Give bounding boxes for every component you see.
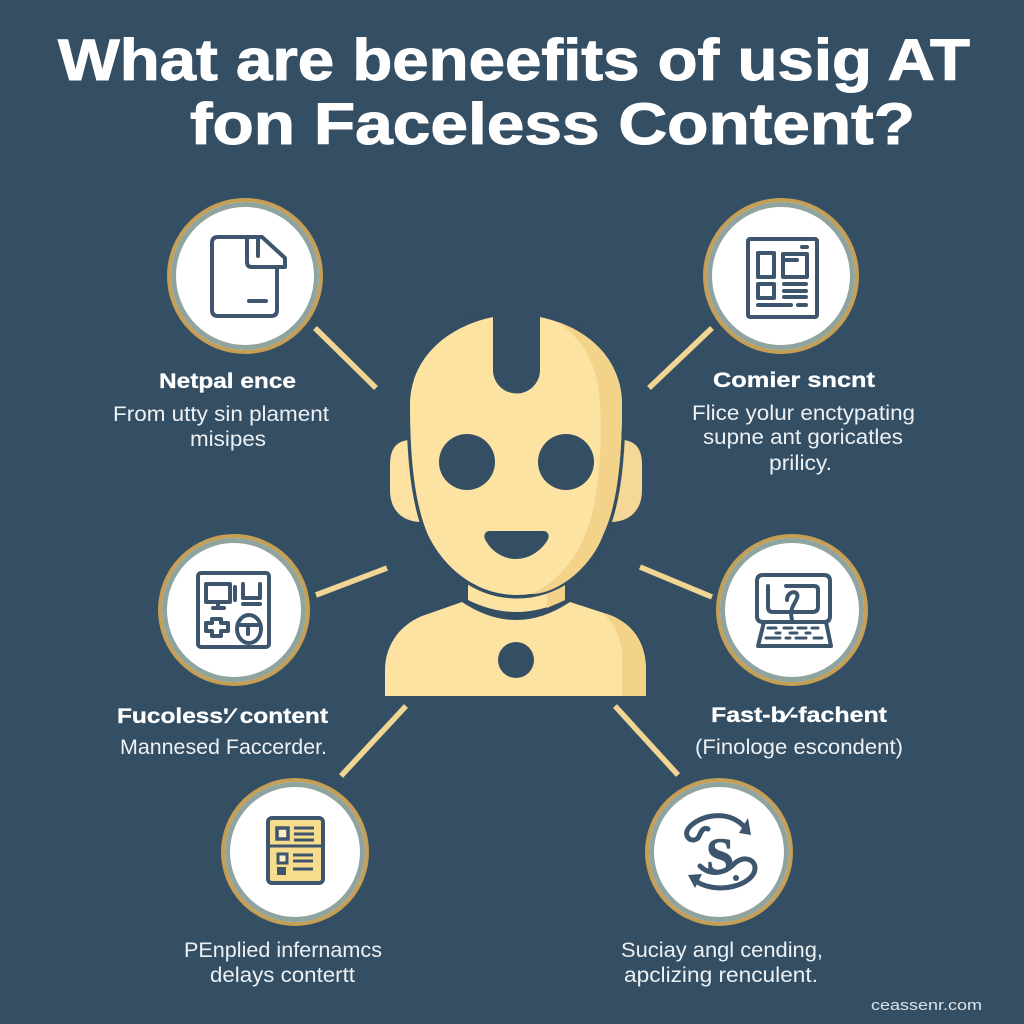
body (385, 602, 646, 696)
footer credit: ceassenr.com (871, 997, 982, 1014)
text block: top right: Flice yolur enctypating (692, 402, 915, 425)
right ear (610, 440, 642, 522)
left ear (390, 440, 422, 522)
head shading (530, 322, 622, 594)
text block: middle right (695, 704, 903, 759)
text block: bottom left: delays contertt (210, 964, 355, 987)
badge: layout page (705, 200, 857, 352)
badge: report card (223, 780, 367, 924)
icon: laptop (757, 575, 831, 646)
text block: middle left (117, 705, 328, 759)
icon: layout page (748, 239, 817, 317)
text block: top right: prilicy. (769, 452, 832, 475)
icon: report card (268, 818, 323, 883)
text block: top left: Netpal ence (159, 370, 296, 393)
text block: top left: From utty sin plament (113, 403, 329, 426)
title: fon Faceless Content? (190, 92, 915, 157)
text block: bottom left (184, 939, 382, 987)
central robot figure (385, 317, 646, 696)
title (58, 28, 970, 157)
text block: bottom left: PEnplied infernamcs (184, 939, 382, 962)
badge: document (169, 200, 321, 352)
text block: top right: supne ant goricatles (703, 426, 903, 449)
mouth (484, 531, 549, 559)
text block: top right: Comier sncnt (713, 369, 875, 392)
text block: bottom right: apclizing renculent. (624, 964, 818, 987)
icon: money cycle: S (706, 827, 734, 883)
left eye (439, 434, 495, 490)
icon: document (212, 237, 285, 316)
badge: laptop (718, 536, 866, 684)
icon: money cycle (687, 816, 755, 888)
text block: middle left: Fucoless'⁄ content (117, 705, 328, 728)
neck (468, 580, 565, 612)
connector spokes (315, 328, 712, 776)
text block: bottom right (621, 939, 823, 987)
text block: top right (692, 369, 915, 475)
text block: bottom right: Suciay angl cending, (621, 939, 823, 962)
text block: middle right: (Finologe escondent) (695, 736, 903, 759)
chest dot (498, 642, 534, 678)
text block: top left (113, 370, 329, 451)
right eye (538, 434, 594, 490)
text block: middle right: Fast-b⁄-fachent (711, 704, 887, 727)
text block: middle left: Mannesed Faccerder. (120, 736, 327, 759)
text block: top left: misipes (190, 428, 266, 451)
badge: dashboard (160, 536, 308, 684)
title: What are beneefits of usig AT (58, 28, 970, 93)
head (410, 317, 622, 595)
icon: dashboard (198, 573, 269, 647)
badge: money cycle (647, 780, 791, 924)
